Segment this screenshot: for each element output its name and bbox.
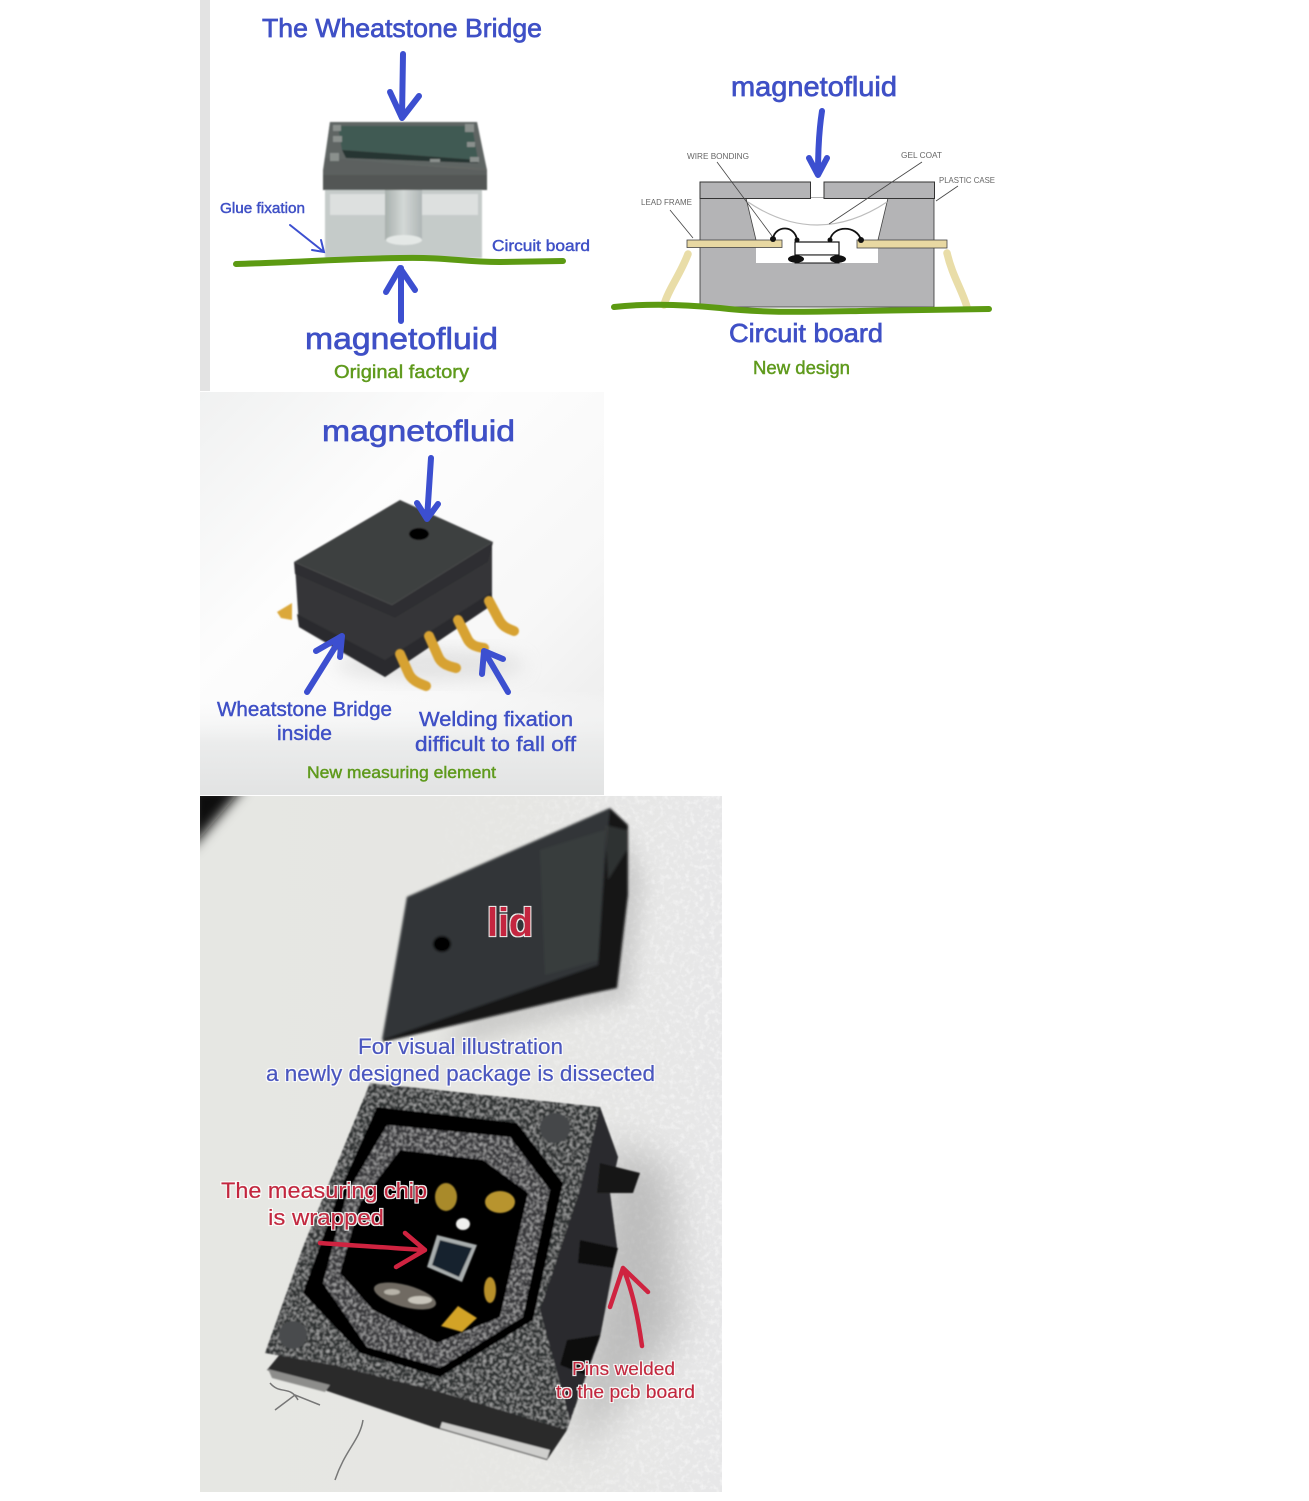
label: GEL COAT: GEL COAT <box>901 150 942 160</box>
lead solder legs <box>664 253 967 307</box>
panel: original factory <box>200 0 590 391</box>
caption: New design: New design <box>753 358 850 378</box>
lid <box>382 808 628 1042</box>
chip body <box>294 500 493 677</box>
panel: new design <box>614 71 995 378</box>
label: Wheatstone Bridge inside: Wheatstone Bridge <box>217 698 392 721</box>
package shadow <box>570 1140 680 1460</box>
package housing <box>265 1083 640 1460</box>
label: Wheatstone Bridge inside <box>217 698 392 745</box>
measuring chip <box>427 1235 477 1282</box>
circuit board line <box>236 258 563 264</box>
stray fibres <box>270 1383 363 1480</box>
arrow: to pin <box>482 651 508 692</box>
lid shadow <box>440 830 645 1050</box>
silver solder <box>371 1218 470 1315</box>
label: lid: lid <box>487 901 533 945</box>
label: Circuit board: Circuit board <box>492 238 590 255</box>
grey side strip <box>200 0 210 391</box>
label: Wheatstone Bridge inside: inside <box>277 722 332 745</box>
panel: new measuring element <box>200 392 604 795</box>
arrow: to chip <box>320 1233 425 1267</box>
arrow: to pin <box>610 1268 648 1346</box>
surface speckle <box>576 796 722 1489</box>
label: magnetofluid: magnetofluid <box>731 71 897 102</box>
arrow: up to board <box>386 268 415 321</box>
label: PLASTIC CASE: PLASTIC CASE <box>939 175 995 185</box>
label: Circuit board: Circuit board <box>729 318 883 348</box>
label: WIRE BONDING: WIRE BONDING <box>687 151 749 161</box>
infographic canvas <box>200 0 995 1492</box>
label: Welding fixation: difficult to fall off <box>415 733 576 756</box>
soft shadow under chip <box>335 649 525 681</box>
arrow: into port <box>809 111 827 175</box>
label: pins welded: to the pcb board <box>556 1381 695 1402</box>
label: measuring chip: The measuring chip <box>221 1178 427 1203</box>
caption: New measuring element: New measuring element <box>307 763 496 782</box>
photo background <box>200 796 722 1492</box>
sensor die illustration <box>323 122 487 258</box>
arrow: to bridge <box>307 636 342 692</box>
bond pads <box>330 124 479 162</box>
blue caption: For visual illustration <box>358 1034 563 1059</box>
label: Glue fixation: Glue fixation <box>220 201 305 217</box>
label: Welding fixation: Welding fixation <box>419 708 573 731</box>
leader lines <box>670 162 958 238</box>
label: LEAD FRAME: LEAD FRAME <box>641 197 692 207</box>
arrow: down to bridge <box>390 54 419 118</box>
label: pins welded: Pins welded <box>572 1358 675 1379</box>
arrow: to port <box>417 458 438 519</box>
label: magnetofluid: magnetofluid <box>305 321 498 356</box>
blue caption <box>266 1034 655 1086</box>
label: pins welded <box>556 1358 695 1402</box>
blue caption: a newly designed package is dissected <box>266 1061 655 1086</box>
panel background <box>200 392 604 795</box>
dark corner <box>200 796 248 852</box>
label: Welding fixation <box>415 708 576 756</box>
arrow: glue <box>290 225 324 252</box>
left pin <box>277 603 292 620</box>
gold pins <box>400 601 514 686</box>
label: magnetofluid: magnetofluid <box>322 415 515 448</box>
package cross-section <box>687 182 947 307</box>
label: measuring chip <box>221 1178 427 1230</box>
panel: dissected package photo <box>190 786 722 1492</box>
label: measuring chip: is wrapped <box>268 1205 384 1230</box>
pin stubs <box>597 1163 640 1193</box>
caption: Original factory: Original factory <box>334 362 469 382</box>
circuit board line <box>614 305 989 312</box>
heading: The Wheatstone Bridge: The Wheatstone Bridge <box>262 13 542 43</box>
gold pads <box>435 1183 515 1332</box>
